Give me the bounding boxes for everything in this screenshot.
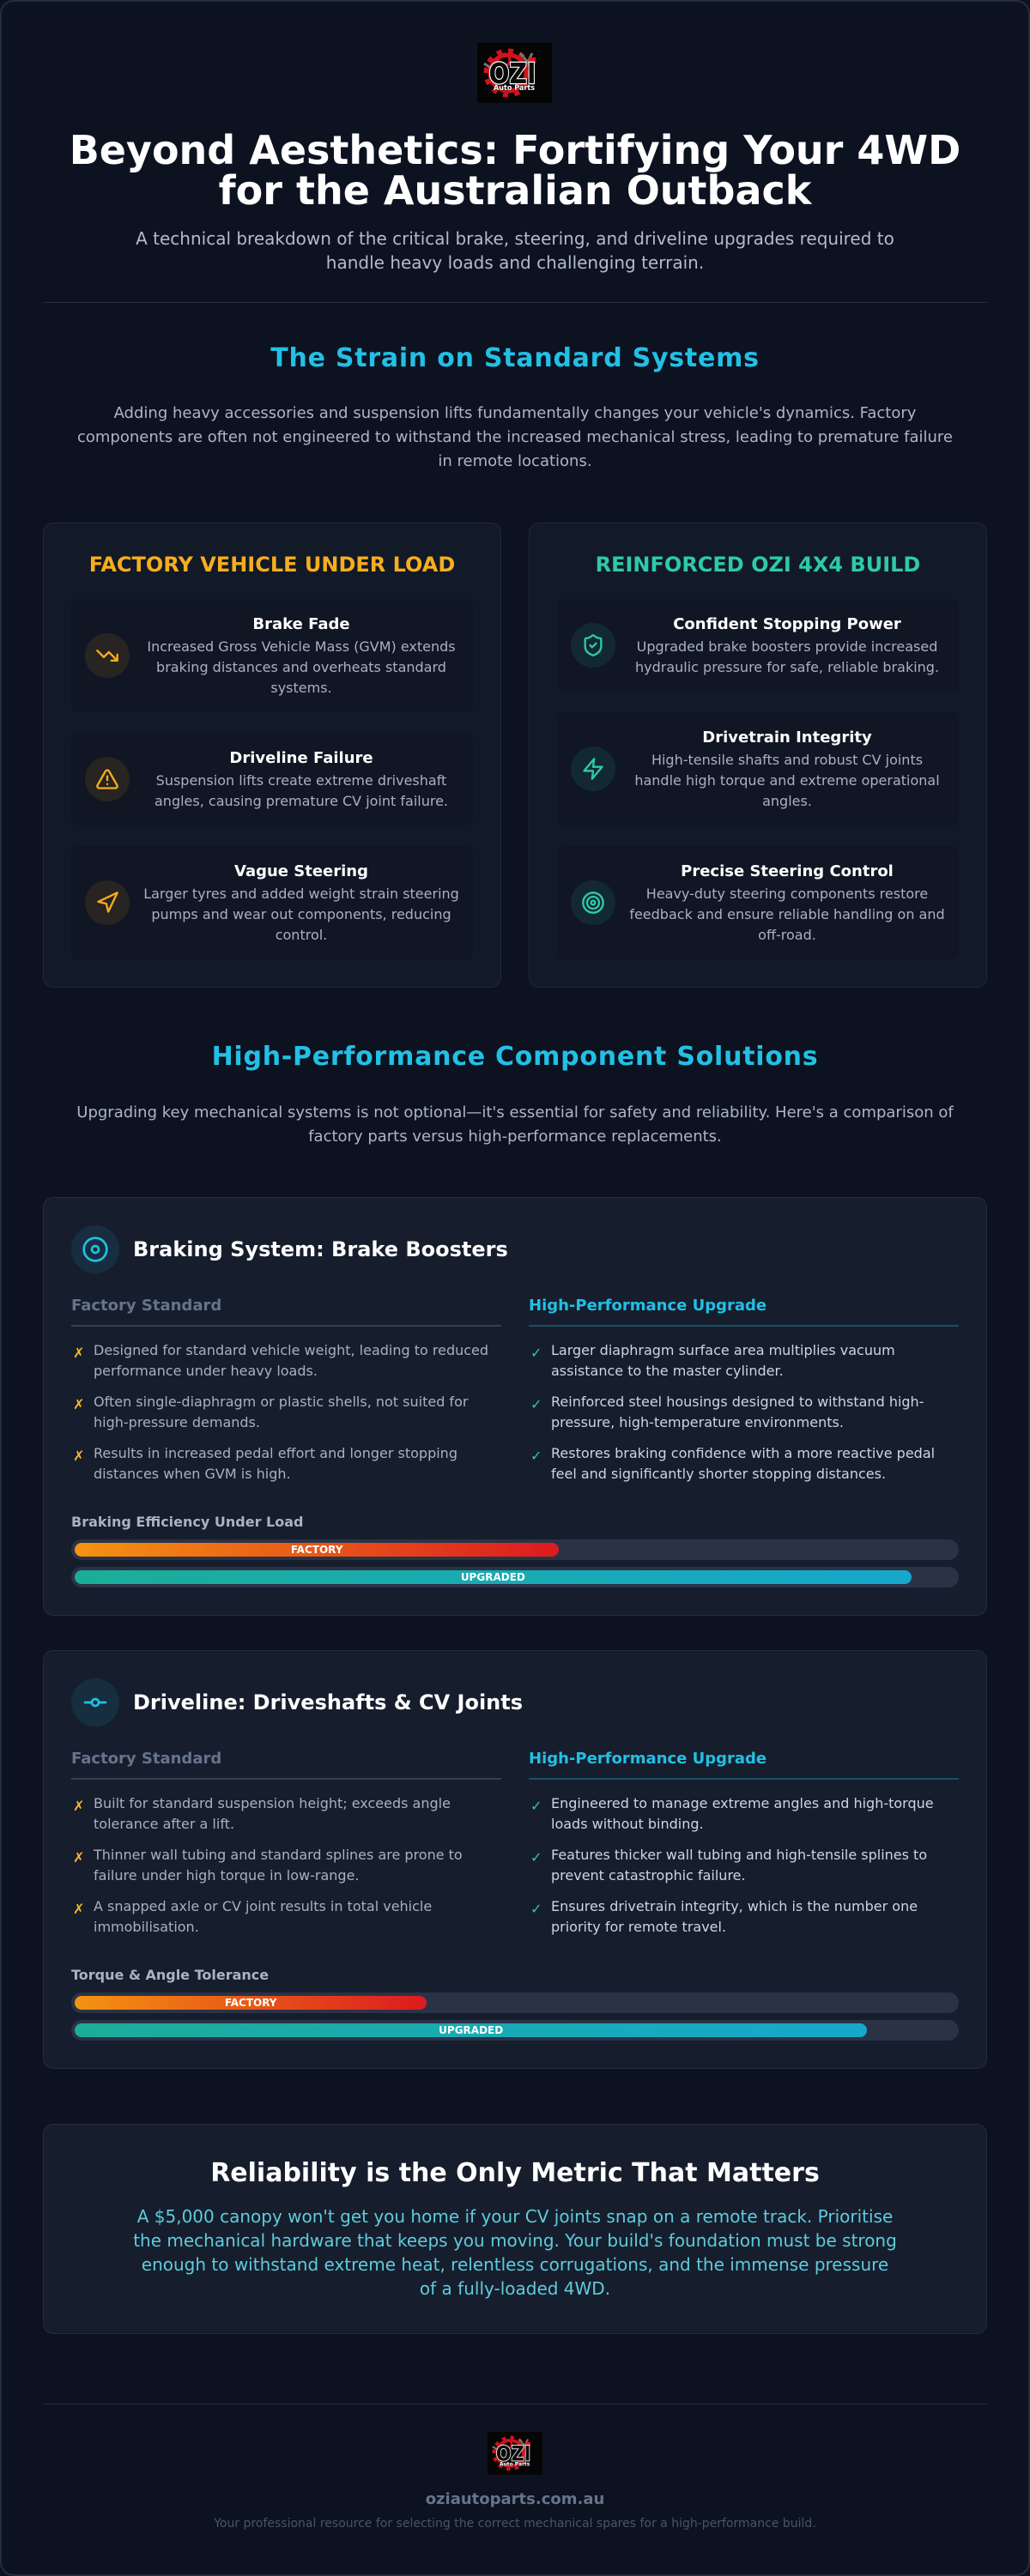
section intro: solutions: Upgrading key mechanical systems is not optional—it's essential for safety and reliability. Here's a comparison of xyxy=(76,1104,954,1122)
item text xyxy=(154,749,448,809)
column: high-performance upgrade: ✓ xyxy=(530,1849,542,1865)
item text: Confident Stopping Power xyxy=(673,615,901,633)
item: vague steering xyxy=(71,846,473,959)
bar: factory xyxy=(71,1992,959,2013)
subtitle xyxy=(136,228,894,273)
column: high-performance upgrade: High-Performance Upgrade xyxy=(529,1297,766,1315)
column: high-performance upgrade: assistance to the master cylinder. xyxy=(551,1363,784,1379)
column: high-performance upgrade xyxy=(529,1750,959,1935)
column: factory standard: immobilisation. xyxy=(94,1919,199,1935)
column: factory standard xyxy=(71,1297,501,1482)
item text: feedback and ensure reliable handling on and xyxy=(629,906,945,922)
item text: angles. xyxy=(762,793,812,809)
column: factory standard: Built for standard suspension height; exceeds angle xyxy=(94,1795,451,1811)
column: high-performance upgrade: ✓ xyxy=(530,1396,542,1412)
column: factory standard: Results in increased pedal effort and longer stopping xyxy=(94,1445,457,1461)
column: high-performance upgrade: prevent catastrophic failure. xyxy=(551,1867,746,1884)
bar: upgraded xyxy=(71,1567,959,1587)
column: high-performance upgrade: pressure, high-temperature environments. xyxy=(551,1414,844,1430)
column: factory standard: Factory Standard xyxy=(71,1297,221,1315)
item: confident stopping power xyxy=(557,599,959,692)
column: high-performance upgrade: High-Performance Upgrade xyxy=(529,1750,766,1768)
title: for the Australian Outback xyxy=(219,167,811,214)
column: high-performance upgrade: feel and significantly shorter stopping distances. xyxy=(551,1466,886,1482)
icon: shield check xyxy=(571,623,615,668)
item text xyxy=(143,862,459,943)
item text xyxy=(629,862,945,943)
column: factory standard: tolerance after a lift. xyxy=(94,1816,234,1832)
column: high-performance upgrade xyxy=(529,1297,959,1482)
footer logo: Auto Parts xyxy=(500,2461,530,2467)
column: high-performance upgrade: ✓ xyxy=(530,1901,542,1917)
bar: factory xyxy=(71,1539,959,1560)
column: factory standard: performance under heavy loads. xyxy=(94,1363,318,1379)
item: drivetrain integrity xyxy=(557,712,959,825)
section heading: solutions: High-Performance Component Solutions xyxy=(212,1042,818,1072)
item text: Vague Steering xyxy=(234,862,368,880)
item text: High-tensile shafts and robust CV joints xyxy=(651,752,923,768)
column: factory standard: high-pressure demands. xyxy=(94,1414,260,1430)
icon: brake disc xyxy=(71,1225,119,1273)
column: factory standard: ✗ xyxy=(73,1849,84,1865)
section heading: strain: The Strain on Standard Systems xyxy=(270,343,760,373)
title: Beyond Aesthetics: Fortifying Your 4WD xyxy=(70,127,960,173)
item text: control. xyxy=(276,927,327,943)
item text: angles, causing premature CV joint failure. xyxy=(154,793,448,809)
callout text: the mechanical hardware that keeps you moving. Your build's foundation must be strong xyxy=(133,2230,897,2251)
column: high-performance upgrade: Engineered to manage extreme angles and high-torque xyxy=(551,1795,934,1811)
item text: Suspension lifts create extreme driveshaft xyxy=(156,772,446,789)
icon: warning triangle xyxy=(85,757,130,801)
item text: systems. xyxy=(270,680,332,696)
subtitle: handle heavy loads and challenging terrain. xyxy=(326,252,704,273)
section intro: strain: components are often not engineered to withstand the increased mechanical stress, leading to premature failure xyxy=(77,428,953,446)
column: high-performance upgrade: Restores braking confidence with a more reactive pedal xyxy=(551,1445,935,1461)
item text: Brake Fade xyxy=(252,615,350,633)
item: driveline failure xyxy=(71,733,473,825)
callout text: A $5,000 canopy won't get you home if your CV joints snap on a remote track. Prioritise xyxy=(137,2206,893,2227)
column: factory standard: Often single-diaphragm or plastic shells, not suited for xyxy=(94,1394,468,1410)
item text: off-road. xyxy=(758,927,816,943)
callout: reliability xyxy=(43,2124,987,2334)
column: factory standard xyxy=(71,1750,501,1935)
item text: Heavy-duty steering components restore xyxy=(646,886,928,902)
column: factory standard: distances when GVM is high. xyxy=(94,1466,291,1482)
icon: lightning bolt xyxy=(571,747,615,791)
item text: Driveline Failure xyxy=(229,749,373,767)
column: high-performance upgrade: Features thicker wall tubing and high-tensile splines to xyxy=(551,1847,927,1863)
chart label: Braking Efficiency Under Load xyxy=(71,1514,303,1530)
column: factory standard: failure under high torque in low-range. xyxy=(94,1867,359,1884)
icon: driveshaft joint xyxy=(71,1678,119,1726)
callout heading: Reliability is the Only Metric That Matters xyxy=(210,2158,820,2188)
panel: braking system xyxy=(43,1197,987,1616)
footer logo: OZI xyxy=(496,2442,530,2465)
icon: target xyxy=(571,880,615,925)
icon: navigation xyxy=(85,880,130,925)
item text: braking distances and overheats standard xyxy=(156,659,446,675)
footer site name: oziautoparts.com.au xyxy=(426,2490,604,2508)
section intro: strain: Adding heavy accessories and suspension lifts fundamentally changes your vehicle's dynamics. Factory xyxy=(114,404,916,422)
item: brake fade xyxy=(71,599,473,712)
column: factory standard: Designed for standard vehicle weight, leading to reduced xyxy=(94,1342,488,1358)
panel: reinforced ozi 4x4 build xyxy=(529,523,987,988)
item: precise steering control xyxy=(557,846,959,959)
header logo: Auto Parts xyxy=(494,84,535,93)
header logo xyxy=(477,43,552,103)
callout text: enough to withstand extreme heat, relentless corrugations, and the immense pressure xyxy=(142,2254,888,2275)
title xyxy=(70,127,960,214)
panel heading: FACTORY VEHICLE UNDER LOAD xyxy=(89,553,455,577)
section intro: solutions xyxy=(76,1104,954,1146)
header logo: OZI xyxy=(489,57,536,90)
item text: pumps and wear out components, reducing xyxy=(151,906,451,922)
column: high-performance upgrade: ✓ xyxy=(530,1798,542,1814)
column: high-performance upgrade: loads without binding. xyxy=(551,1816,704,1832)
item text: hydraulic pressure for safe, reliable braking. xyxy=(635,659,939,675)
column: factory standard: A snapped axle or CV joint results in total vehicle xyxy=(94,1898,432,1914)
bar: upgraded: UPGRADED xyxy=(439,2024,503,2036)
item text: Larger tyres and added weight strain steering xyxy=(143,886,459,902)
chart label: Torque & Angle Tolerance xyxy=(71,1967,269,1983)
bar: factory: FACTORY xyxy=(225,1997,276,2009)
column: high-performance upgrade: ✓ xyxy=(530,1448,542,1464)
callout text xyxy=(133,2206,897,2299)
column: high-performance upgrade: Ensures drivetrain integrity, which is the number one xyxy=(551,1898,918,1914)
column: factory standard: ✗ xyxy=(73,1901,84,1917)
column: factory standard: ✗ xyxy=(73,1448,84,1464)
subtitle: A technical breakdown of the critical brake, steering, and driveline upgrades required to xyxy=(136,228,894,249)
item text xyxy=(147,615,456,696)
column: factory standard: Factory Standard xyxy=(71,1750,221,1768)
panel heading: REINFORCED OZI 4X4 BUILD xyxy=(596,553,920,577)
item text: Increased Gross Vehicle Mass (GVM) extends xyxy=(147,638,456,655)
section intro: strain xyxy=(77,404,953,470)
panel: driveline xyxy=(43,1650,987,2069)
column: high-performance upgrade: priority for remote travel. xyxy=(551,1919,726,1935)
item text: handle high torque and extreme operational xyxy=(634,772,940,789)
panel: factory vehicle under load xyxy=(43,523,501,988)
bar: factory: FACTORY xyxy=(291,1544,342,1556)
card heading: Driveline: Driveshafts & CV Joints xyxy=(133,1690,523,1714)
item text: Precise Steering Control xyxy=(681,862,894,880)
bar: upgraded xyxy=(71,2020,959,2041)
card heading: Braking System: Brake Boosters xyxy=(133,1237,508,1261)
section intro: strain: in remote locations. xyxy=(438,452,592,470)
item text: Upgraded brake boosters provide increased xyxy=(637,638,937,655)
section intro: solutions: factory parts versus high-performance replacements. xyxy=(308,1128,722,1146)
item text: Drivetrain Integrity xyxy=(702,729,872,747)
bar: upgraded: UPGRADED xyxy=(461,1571,525,1583)
column: factory standard: ✗ xyxy=(73,1345,84,1361)
icon: trending down xyxy=(85,633,130,678)
column: factory standard: ✗ xyxy=(73,1396,84,1412)
footer logo xyxy=(488,2432,542,2475)
column: factory standard: ✗ xyxy=(73,1798,84,1814)
column: factory standard: Thinner wall tubing and standard splines are prone to xyxy=(94,1847,463,1863)
column: high-performance upgrade: Reinforced steel housings designed to withstand high- xyxy=(551,1394,924,1410)
callout text: of a fully-loaded 4WD. xyxy=(420,2278,610,2299)
column: high-performance upgrade: ✓ xyxy=(530,1345,542,1361)
footer tagline: Your professional resource for selecting the correct mechanical spares for a high-performance build. xyxy=(214,2517,816,2531)
column: high-performance upgrade: Larger diaphragm surface area multiplies vacuum xyxy=(551,1342,895,1358)
item text xyxy=(634,729,940,809)
item text xyxy=(635,615,939,675)
